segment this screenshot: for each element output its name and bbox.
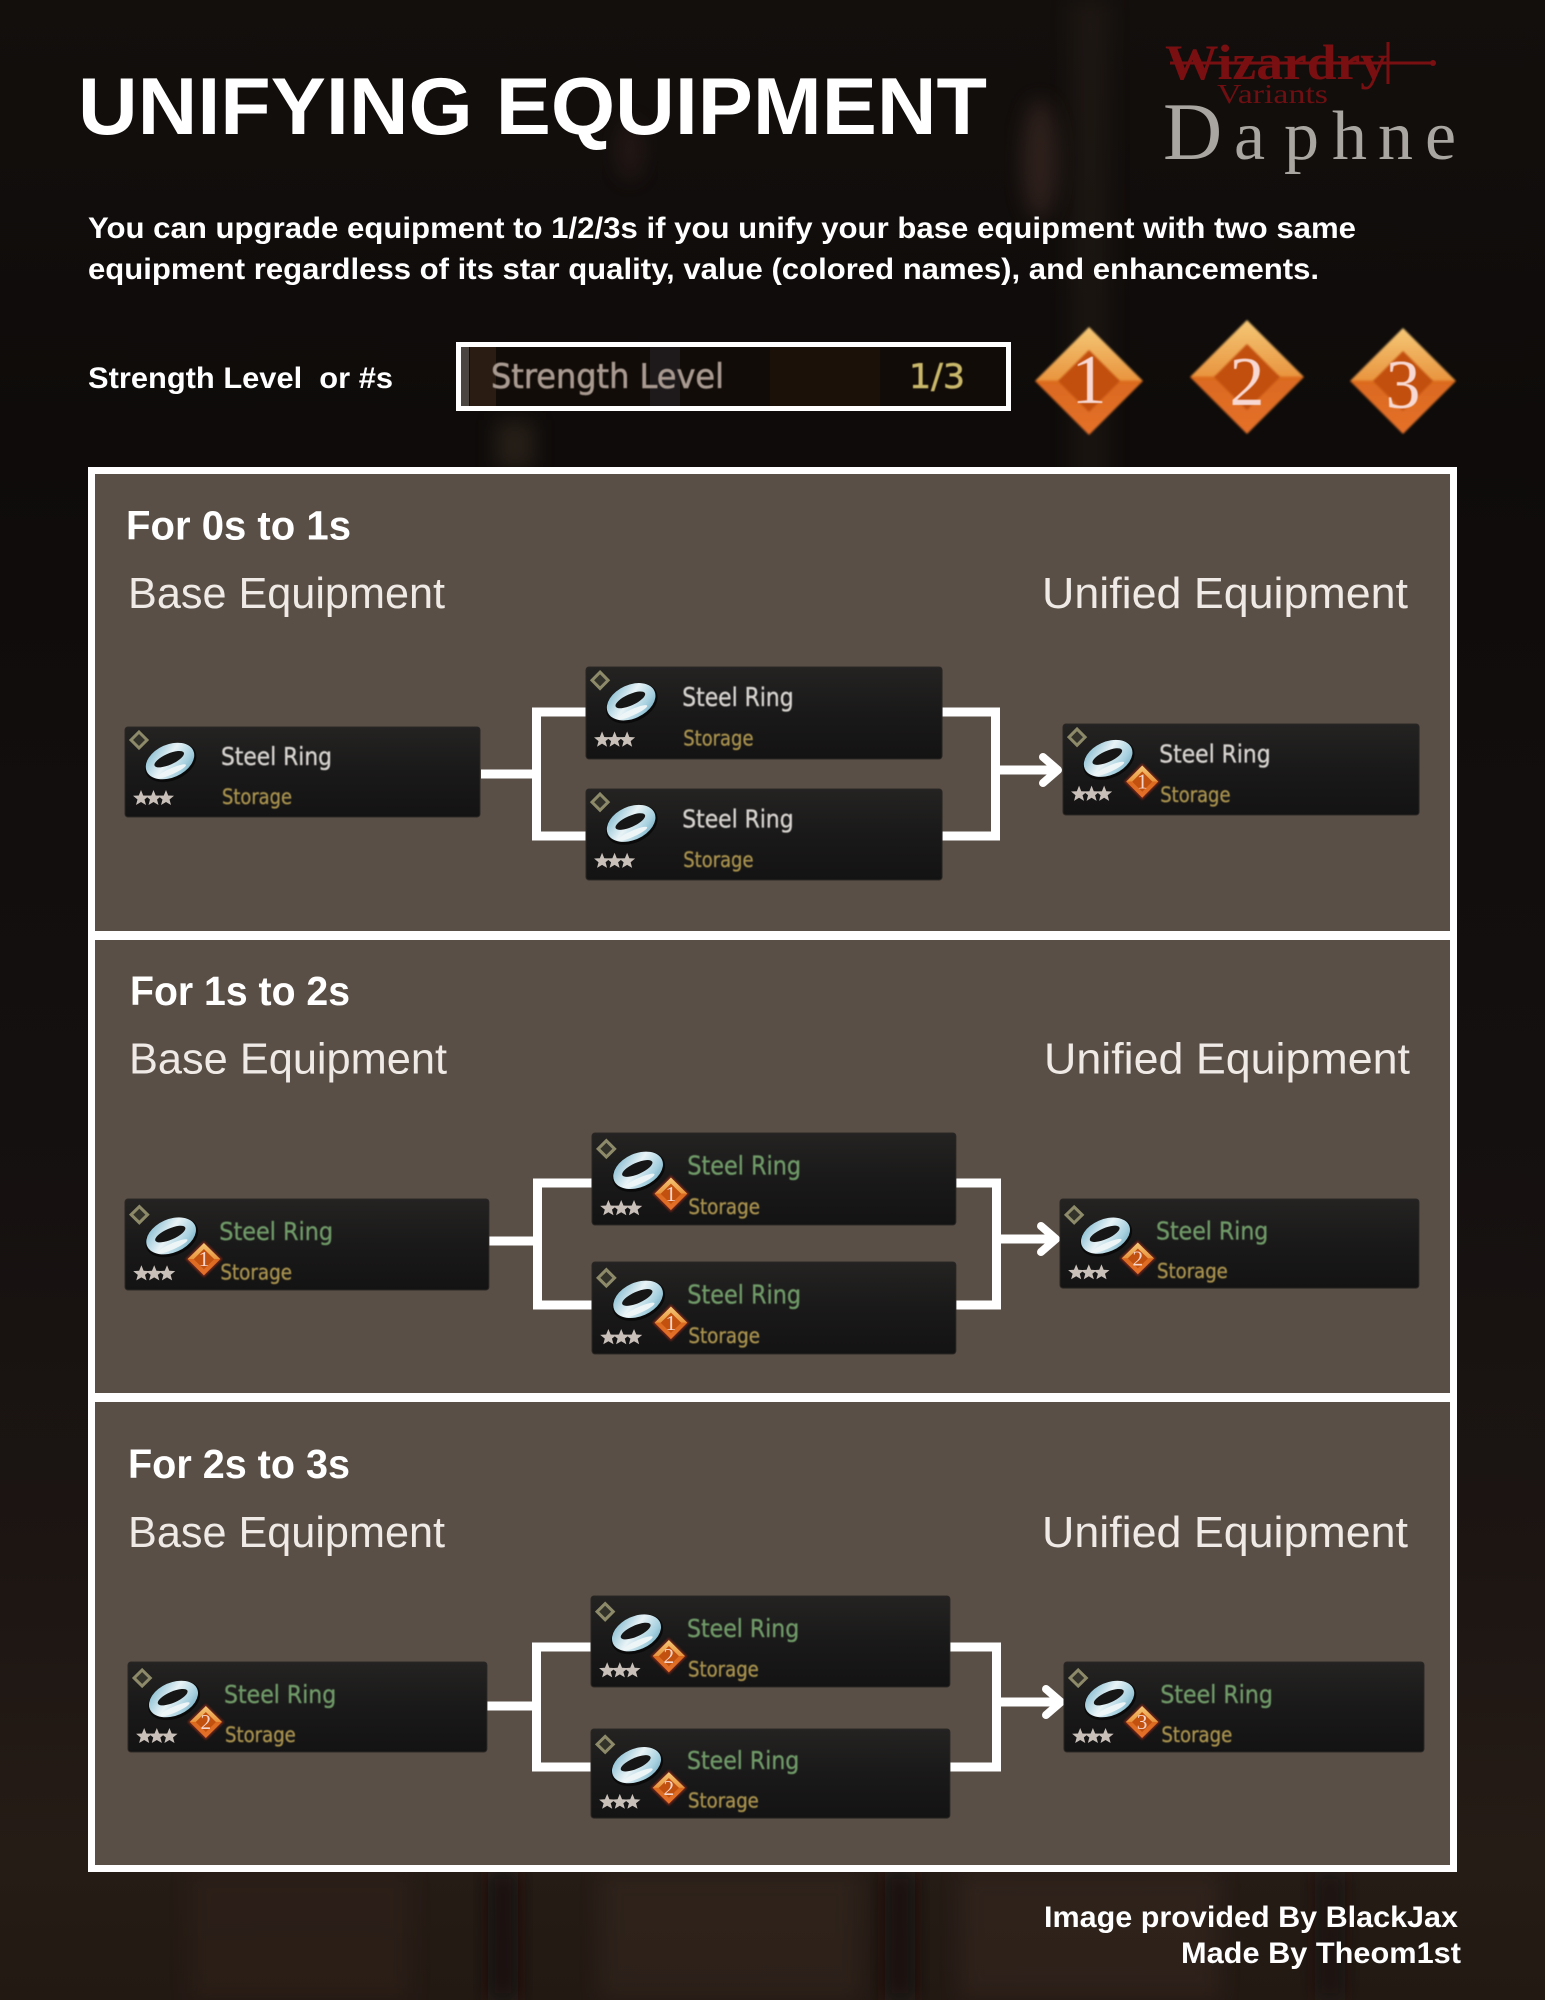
strength level bar (458, 344, 1008, 408)
logo subtitle Variants: Variants (1217, 79, 1328, 109)
card: base steel ring 2s (128, 1662, 487, 1752)
connector: bracket and arrow (487, 1647, 1061, 1767)
strength level bar: 1/3 (909, 357, 965, 397)
card: unified steel ring 3s: Storage (1161, 1722, 1232, 1747)
card: material steel ring 2s bottom: 2 (664, 1776, 674, 1800)
card: material steel ring top: Steel Ring (682, 683, 794, 712)
strength level label: Strength Level or #s (88, 362, 393, 395)
card: base steel ring 2s: Storage (225, 1722, 296, 1747)
card: unified steel ring 1s (1063, 724, 1419, 815)
card: material steel ring 2s bottom (591, 1729, 950, 1818)
intro text: equipment regardless of its star quality, value (colored names), and enhancements. (88, 253, 1319, 286)
credits (1044, 1901, 1461, 1970)
card: material steel ring 1s bottom (592, 1262, 956, 1354)
label: base equipment: Base Equipment (128, 1508, 445, 1557)
card: material steel ring 1s bottom: Steel Ring (687, 1280, 801, 1310)
icon: rank diamond 2 (1190, 320, 1304, 434)
intro text (88, 212, 1356, 286)
card: base steel ring: Storage (222, 785, 292, 809)
card: base steel ring 1s: Storage (220, 1261, 292, 1285)
card: material steel ring 2s top: Steel Ring (687, 1614, 799, 1643)
connector: bracket and arrow (489, 1183, 1056, 1305)
panel: 1s to 2s (125, 968, 1419, 1354)
heading: For 1s to 2s: For 1s to 2s (130, 968, 350, 1014)
title: UNIFYING EQUIPMENT (78, 62, 987, 152)
card: material steel ring 1s bottom: 1 (666, 1311, 676, 1335)
icon: rank diamond 1: 1 (1072, 342, 1106, 419)
card: material steel ring 2s top (591, 1596, 950, 1687)
card: base steel ring 2s: 2 (201, 1710, 211, 1734)
icon: rank diamond 3: 3 (1386, 347, 1420, 424)
card: material steel ring top (586, 667, 942, 759)
icon: rank diamond 3 (1350, 328, 1456, 434)
card: material steel ring 2s top: Storage (688, 1657, 759, 1682)
connector: bracket and arrow (481, 712, 1058, 836)
card: material steel ring 1s top: Steel Ring (687, 1151, 801, 1181)
card: unified steel ring 2s: 2 (1133, 1247, 1143, 1270)
card: unified steel ring 1s: 1 (1137, 770, 1147, 794)
card: base steel ring 2s: Steel Ring (224, 1680, 336, 1709)
credits: Image provided By BlackJax (1044, 1901, 1458, 1934)
card: base steel ring: Steel Ring (221, 742, 332, 771)
card: material steel ring 2s bottom: Storage (688, 1788, 759, 1813)
label: unified equipment: Unified Equipment (1042, 569, 1408, 618)
card: material steel ring 1s top (592, 1133, 956, 1225)
icon: rank diamond 1 (1035, 327, 1143, 435)
intro text: You can upgrade equipment to 1/2/3s if you unify your base equipment with two same (88, 212, 1356, 245)
card: unified steel ring 3s: 3 (1137, 1710, 1147, 1734)
card: material steel ring bottom: Steel Ring (682, 804, 794, 833)
card: material steel ring bottom (586, 789, 942, 880)
card: material steel ring 2s bottom: Steel Ring (687, 1746, 799, 1775)
logo wordmark Wizardry: Wizardry (1165, 34, 1387, 90)
heading: For 2s to 3s: For 2s to 3s (128, 1441, 350, 1487)
card: unified steel ring 1s: Storage (1160, 782, 1231, 807)
icon: rank diamond 2: 2 (1230, 344, 1264, 421)
card: unified steel ring 3s: Steel Ring (1160, 1680, 1273, 1709)
card: unified steel ring 3s (1064, 1662, 1424, 1752)
label: base equipment: Base Equipment (128, 569, 445, 618)
card: material steel ring 1s bottom: Storage (688, 1324, 760, 1349)
card: unified steel ring 2s: Storage (1157, 1258, 1228, 1283)
card: base steel ring 1s (125, 1199, 489, 1290)
credits: Made By Theom1st (1181, 1937, 1461, 1970)
card: base steel ring 1s: 1 (199, 1247, 209, 1271)
card: material steel ring 2s top: 2 (664, 1644, 674, 1668)
label: base equipment: Base Equipment (129, 1034, 447, 1084)
card: material steel ring 1s top: Storage (688, 1195, 760, 1220)
logo: Wizardry Variants Daphne (1163, 34, 1456, 177)
label: unified equipment: Unified Equipment (1044, 1034, 1410, 1084)
logo sword stroke (1170, 42, 1436, 84)
card: unified steel ring 2s: Steel Ring (1156, 1217, 1268, 1246)
card: material steel ring top: Storage (683, 727, 754, 752)
heading: For 0s to 1s: For 0s to 1s (126, 502, 351, 548)
card: base steel ring 1s: Steel Ring (219, 1217, 333, 1247)
logo wordmark Daphne: Daphne (1163, 86, 1456, 177)
panel: 0s to 1s (125, 502, 1419, 880)
card: unified steel ring 1s: Steel Ring (1159, 739, 1271, 768)
card: base steel ring (125, 727, 480, 817)
card: material steel ring bottom: Storage (683, 847, 754, 872)
panel: unify tiers frame (88, 470, 1457, 1868)
card: unified steel ring 2s (1060, 1199, 1419, 1288)
panel: 2s to 3s (128, 1441, 1424, 1818)
label: unified equipment: Unified Equipment (1042, 1508, 1408, 1557)
strength level bar: Strength Level (491, 357, 724, 397)
card: material steel ring 1s top: 1 (666, 1182, 676, 1206)
